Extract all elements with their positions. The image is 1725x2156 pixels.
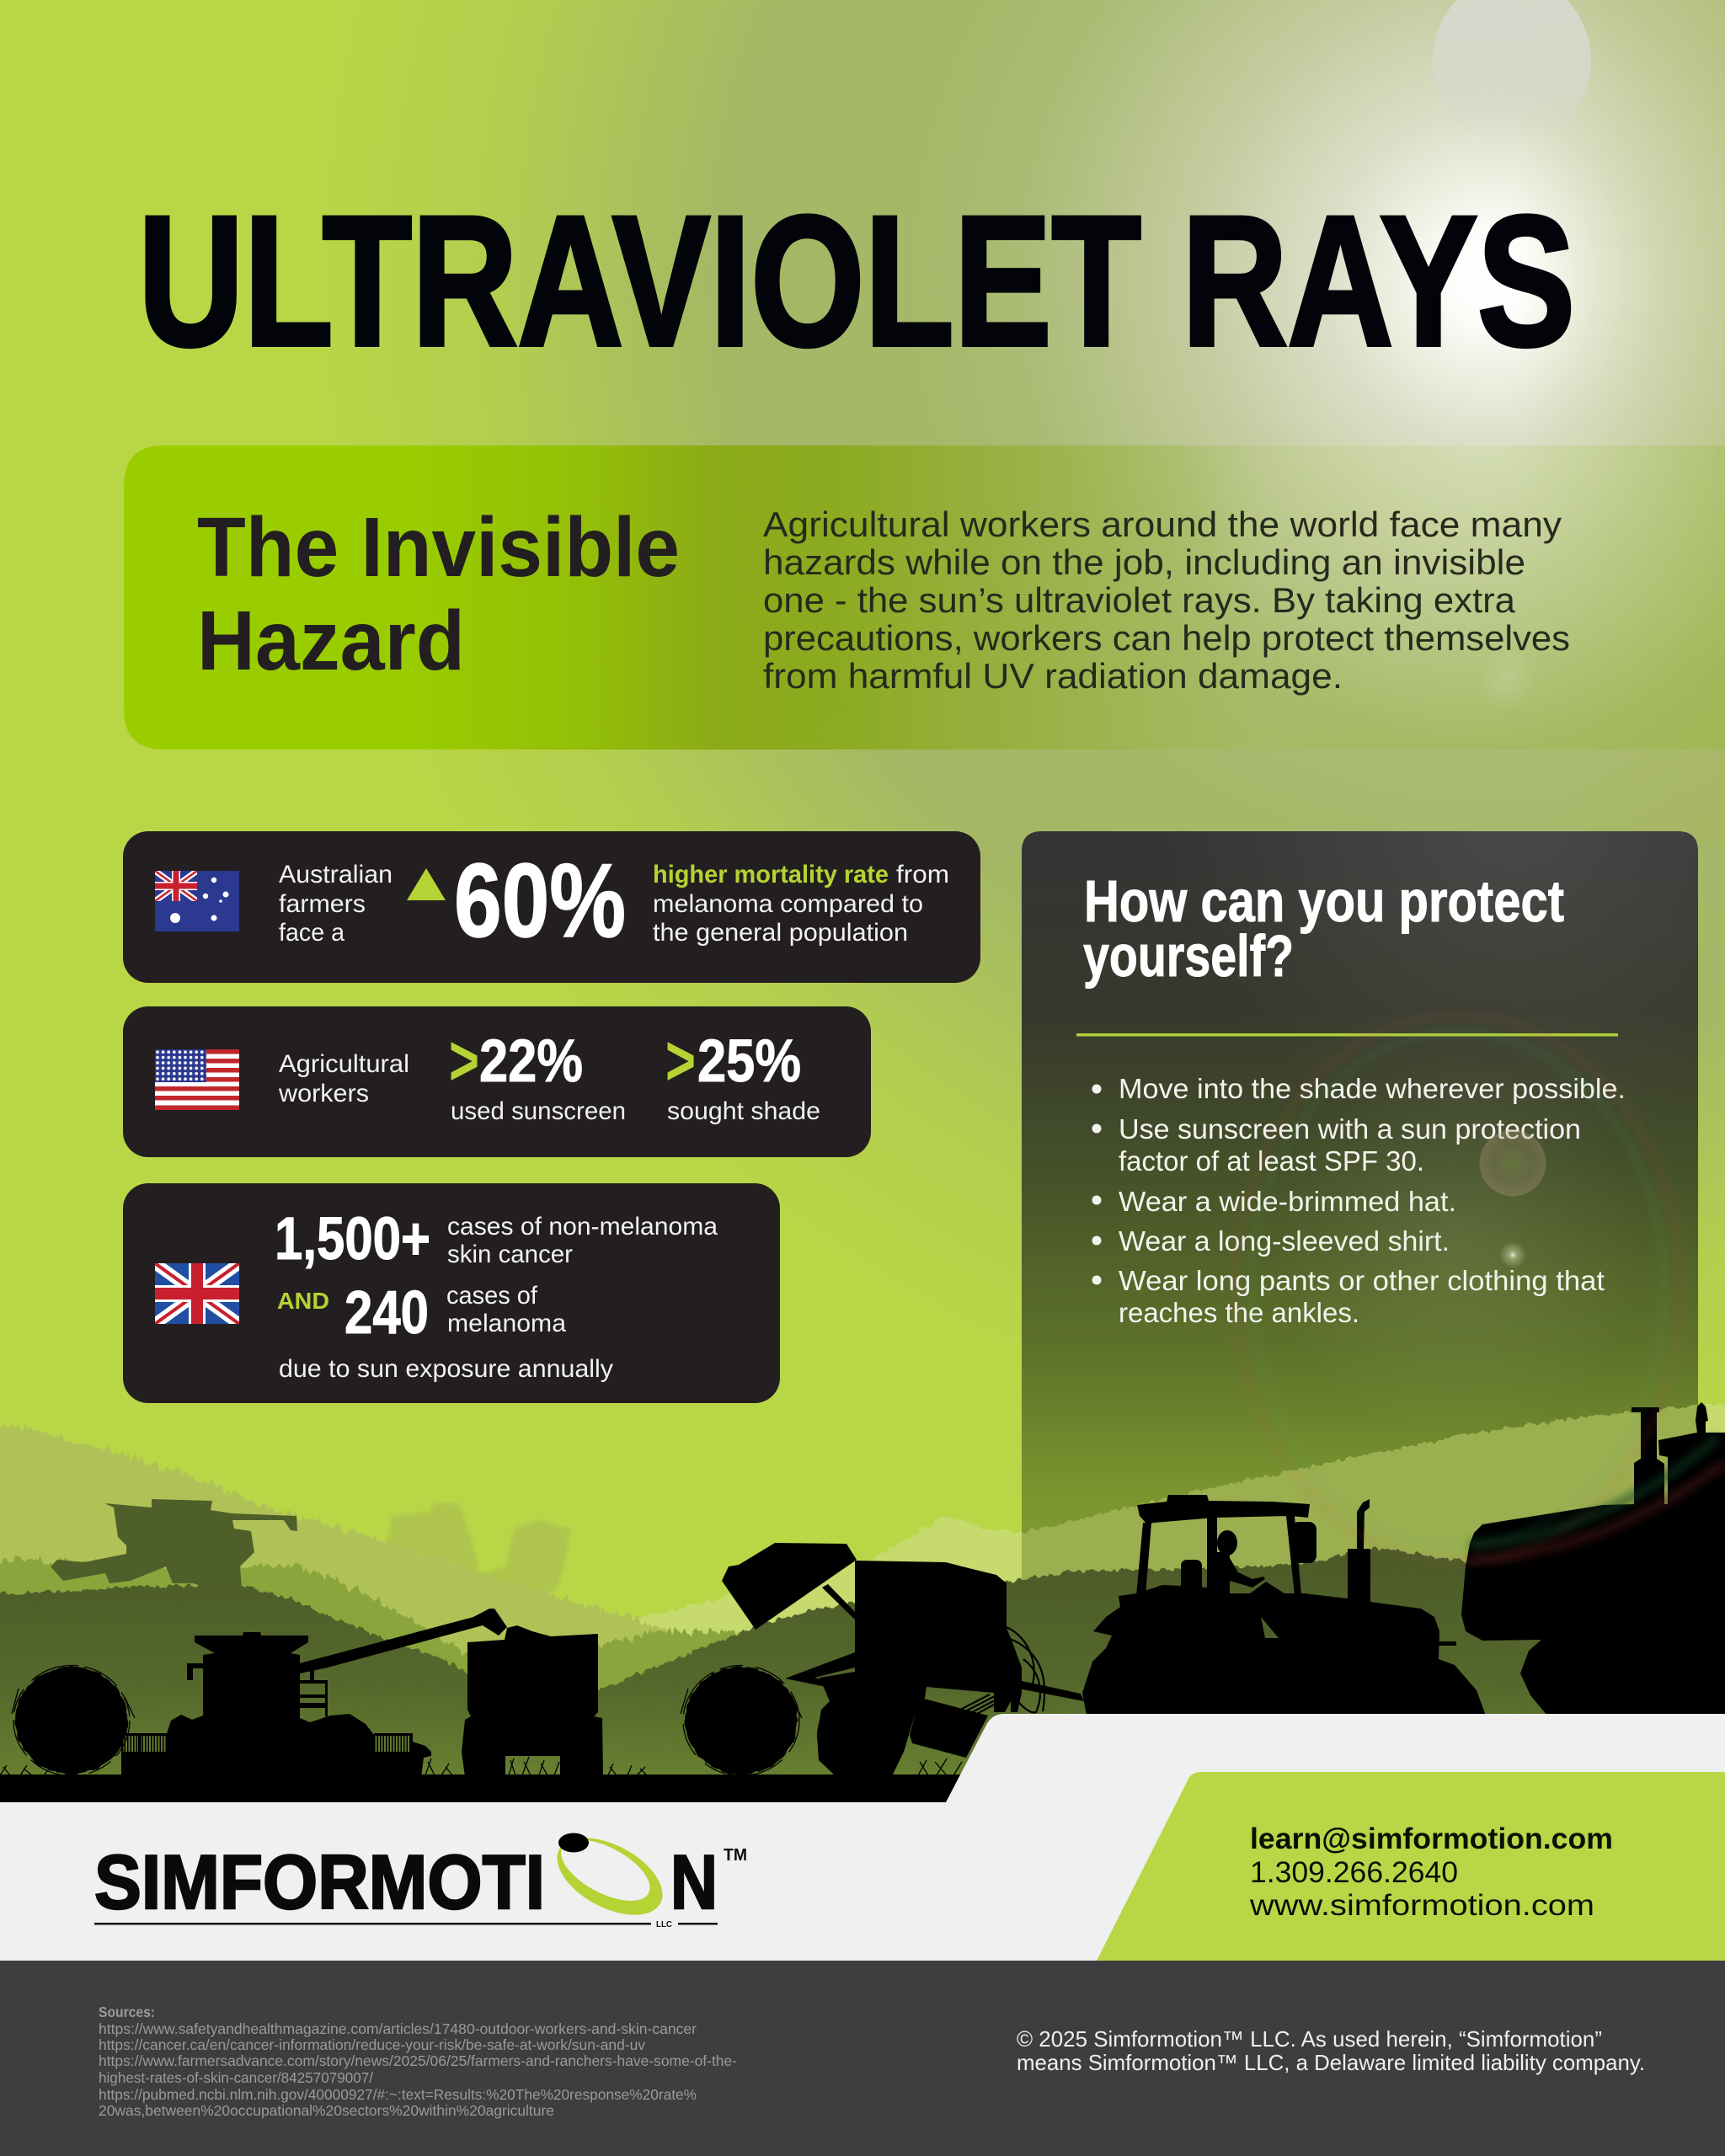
mortality rate description: from <box>896 861 949 889</box>
panel: united states statistic <box>123 1006 871 1157</box>
melanoma statistic: melanoma <box>447 1310 566 1337</box>
non-melanoma statistic: cases of non-melanoma <box>447 1213 718 1241</box>
heading: how can you protect yourself: yourself? <box>1083 923 1294 989</box>
copyright notice <box>1017 2026 1645 2075</box>
australian farmers label: Australian <box>279 861 393 889</box>
annual exposure note: due to sun exposure annually <box>279 1355 613 1383</box>
agricultural workers label: Agricultural <box>279 1050 409 1078</box>
hill seen through the panel <box>1022 1405 1698 1580</box>
dark foreground hill <box>0 1548 1725 1819</box>
silhouette: grain cart and combine <box>121 1609 603 1777</box>
lens flare disc near the top <box>1433 0 1591 145</box>
mortality rate description: higher mortality rate <box>653 861 889 889</box>
panel: united kingdom statistic <box>123 1183 780 1403</box>
sources list: 20was,between%20occupational%20sectors%20within%20agriculture <box>99 2102 554 2119</box>
and connector: AND <box>277 1288 329 1314</box>
australian farmers label <box>279 861 393 947</box>
sloping sage hill <box>0 1426 758 1819</box>
silhouette: middle tractor with driver <box>1082 1495 1486 1716</box>
panel: how can you protect yourself <box>1022 831 1698 1580</box>
intro paragraph: Agricultural workers around the world face many <box>763 504 1562 544</box>
mortality rate description: the general population <box>653 919 908 947</box>
melanoma statistic: cases of <box>446 1282 538 1310</box>
intro paragraph <box>763 504 1570 696</box>
contact details: www.simformotion.com <box>1249 1889 1594 1922</box>
protection tips list: Use sunscreen with a sun protection <box>1119 1113 1581 1145</box>
mid green hill <box>0 1558 1008 1819</box>
sources list: Sources: <box>99 2004 155 2020</box>
icon: up triangle <box>407 868 446 900</box>
sources list <box>99 2004 737 2119</box>
silhouette: round baler with raised tailgate <box>722 1543 1084 1775</box>
sources list: https://pubmed.ncbi.nlm.nih.gov/40000927/#:~:text=Results:%20The%20response%20rate% <box>99 2086 697 2103</box>
mortality rate description: melanoma compared to <box>653 890 923 918</box>
contact details <box>1249 1822 1613 1922</box>
contact details: learn@simformotion.com <box>1250 1822 1613 1855</box>
panel: the invisible hazard <box>124 446 1725 750</box>
heading: the invisible hazard <box>197 500 680 688</box>
sunscreen statistic: > <box>449 1021 479 1100</box>
non-melanoma statistic <box>275 1206 718 1273</box>
copyright notice: means Simformotion™ LLC, a Delaware limited liability company. <box>1017 2050 1645 2075</box>
simformotion logo: SIMFORMOTI <box>94 1840 545 1925</box>
white footer band <box>0 1714 1725 1962</box>
protection tips list: Wear a wide-brimmed hat. <box>1119 1186 1456 1217</box>
sunscreen statistic: 22% <box>479 1028 583 1095</box>
protection tips list: factor of at least SPF 30. <box>1119 1145 1424 1177</box>
icon: australian flag <box>155 871 239 931</box>
sources list: https://www.farmersadvance.com/story/news/2025/06/25/farmers-and-ranchers-have-some-of-the- <box>99 2052 737 2069</box>
60 percent figure: 60% <box>454 843 626 959</box>
background harvester silhouette <box>51 1499 297 1589</box>
sources list: https://www.safetyandhealthmagazine.com/articles/17480-outdoor-workers-and-skin-cancer <box>99 2020 697 2037</box>
silhouette: large tractor at right <box>1461 1402 1725 1716</box>
sources list: https://cancer.ca/en/cancer-information/reduce-your-risk/be-safe-at-work/sun-and-uv <box>99 2036 645 2053</box>
heading: the invisible hazard: The Invisible <box>197 500 680 595</box>
heading: the invisible hazard: Hazard <box>197 594 465 688</box>
intro paragraph: one - the sun’s ultraviolet rays. By taking extra <box>763 580 1516 620</box>
australian farmers label: farmers <box>279 890 366 918</box>
shade statistic: sought shade <box>667 1097 820 1125</box>
contact panel <box>1097 1772 1725 1961</box>
simformotion logo: LLC <box>656 1920 672 1929</box>
heading: how can you protect yourself: How can you protect <box>1084 868 1564 934</box>
australian farmers label: face a <box>279 919 344 947</box>
shade statistic: 25% <box>697 1028 801 1095</box>
far light hill <box>581 1402 1725 1819</box>
combine grates <box>121 1733 411 1752</box>
lens flare rings and ghosts <box>1235 1015 1725 1562</box>
agricultural workers label: workers <box>278 1080 369 1107</box>
simformotion logo: N <box>670 1840 718 1925</box>
copyright notice: © 2025 Simformotion™ LLC. As used herein, “Simformotion” <box>1017 2026 1602 2052</box>
protection tips list <box>1092 1073 1626 1328</box>
panel: australia statistic <box>123 831 980 983</box>
mortality rate description <box>653 861 949 947</box>
protection tips list: Wear long pants or other clothing that <box>1119 1265 1605 1296</box>
intro paragraph: precautions, workers can help protect themselves <box>763 618 1570 658</box>
protection tips list: Move into the shade wherever possible. <box>1119 1073 1626 1104</box>
pale distant harvester <box>386 1503 571 1594</box>
contact details: 1.309.266.2640 <box>1250 1856 1458 1889</box>
intro paragraph: hazards while on the job, including an invisible <box>763 542 1525 582</box>
shade statistic: > <box>665 1021 696 1100</box>
icon: uk flag <box>155 1263 239 1324</box>
sunscreen statistic: used sunscreen <box>451 1097 626 1125</box>
simformotion logo <box>94 1822 747 1931</box>
sources list: highest-rates-of-skin-cancer/84257079007/ <box>99 2069 373 2086</box>
agricultural workers label <box>278 1050 409 1107</box>
protection tips list: Wear a long-sleeved shirt. <box>1119 1225 1450 1257</box>
dark footer <box>0 1961 1725 2156</box>
shade statistic <box>665 1021 820 1125</box>
foreground ground and hay bales <box>0 1666 962 1803</box>
heading: how can you protect yourself <box>1083 868 1564 989</box>
melanoma statistic <box>344 1279 566 1347</box>
simformotion logo: TM <box>724 1846 747 1865</box>
non-melanoma statistic: skin cancer <box>447 1241 573 1268</box>
non-melanoma statistic: 1,500+ <box>275 1206 430 1273</box>
icon: us flag <box>155 1049 239 1110</box>
protection tips list: reaches the ankles. <box>1119 1297 1359 1328</box>
tractor cab gap <box>1261 1617 1279 1638</box>
melanoma statistic: 240 <box>344 1279 429 1347</box>
intro paragraph: from harmful UV radiation damage. <box>763 656 1343 696</box>
sunscreen statistic <box>449 1021 626 1125</box>
grass tufts <box>0 1757 962 1775</box>
